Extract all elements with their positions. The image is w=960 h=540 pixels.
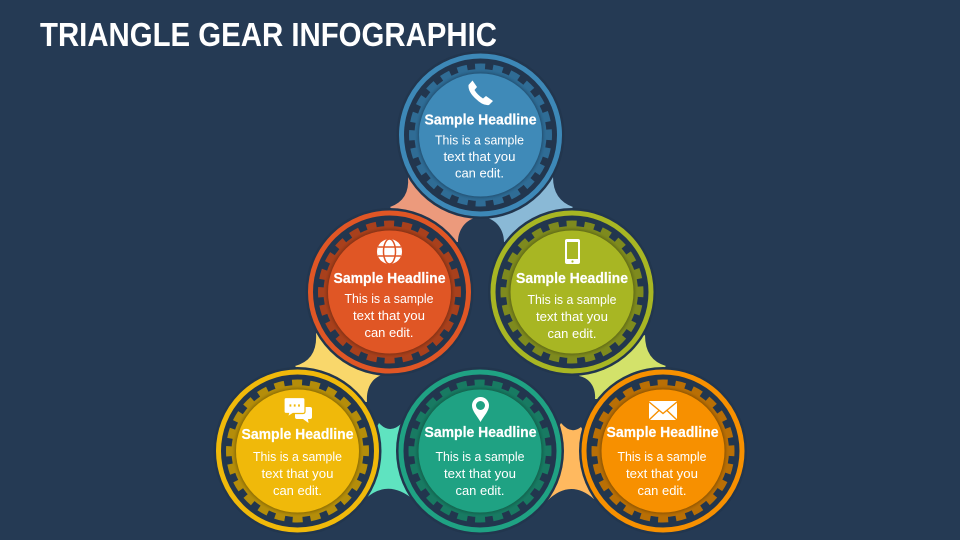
- icon: envelope: [648, 401, 678, 420]
- title: TRIANGLE GEAR INFOGRAPHIC: [40, 16, 497, 53]
- body text: This is a sample: [344, 292, 434, 306]
- body text: can edit.: [638, 484, 686, 498]
- body text: text that you: [353, 309, 425, 323]
- body text: text that you: [536, 310, 608, 324]
- body text: [253, 450, 342, 498]
- body text: [618, 450, 707, 498]
- body text: can edit.: [273, 484, 322, 498]
- body text: [435, 134, 524, 180]
- body text: This is a sample: [618, 450, 707, 464]
- connector: light blue: [481, 177, 573, 242]
- body text: text that you: [444, 150, 516, 164]
- headline: Sample Headline: [424, 112, 536, 128]
- connector: pale lime: [579, 335, 666, 400]
- gear: orange, bottom right: [579, 367, 747, 535]
- connector: light orange: [540, 423, 600, 501]
- body text: text that you: [626, 467, 698, 481]
- body text: This is a sample: [528, 293, 617, 307]
- gear: blue, top: [396, 51, 564, 219]
- headline: Sample Headline: [606, 425, 718, 441]
- connector: salmon: [390, 177, 481, 242]
- icon: map pin: [472, 397, 489, 422]
- body text: can edit.: [455, 166, 504, 180]
- connectors between gears: [295, 177, 666, 501]
- body text: text that you: [262, 467, 334, 481]
- body text: This is a sample: [253, 450, 342, 464]
- headline: Sample Headline: [516, 271, 628, 287]
- gear: red, middle left: [306, 208, 474, 376]
- headline: Sample Headline: [424, 425, 536, 441]
- icon: chat bubbles: [284, 398, 312, 423]
- body text: can edit.: [456, 484, 504, 498]
- body text: text that you: [444, 467, 516, 481]
- icon: phone: [468, 80, 493, 105]
- body text: can edit.: [364, 326, 414, 340]
- body text: [344, 292, 434, 340]
- gear: teal, bottom centre: [396, 367, 564, 535]
- connector: mint: [360, 423, 420, 500]
- body text: This is a sample: [435, 134, 524, 148]
- icon: smartphone: [565, 239, 580, 264]
- headline: Sample Headline: [242, 427, 354, 443]
- body text: This is a sample: [436, 450, 525, 464]
- headline: Sample Headline: [334, 271, 446, 287]
- body text: [436, 450, 525, 498]
- body text: [528, 293, 617, 341]
- gear: yellow, bottom left: [214, 367, 382, 535]
- connector: pale yellow: [295, 333, 382, 402]
- body text: can edit.: [548, 327, 596, 341]
- icon: globe: [377, 239, 402, 264]
- gear: green, middle right: [488, 208, 656, 376]
